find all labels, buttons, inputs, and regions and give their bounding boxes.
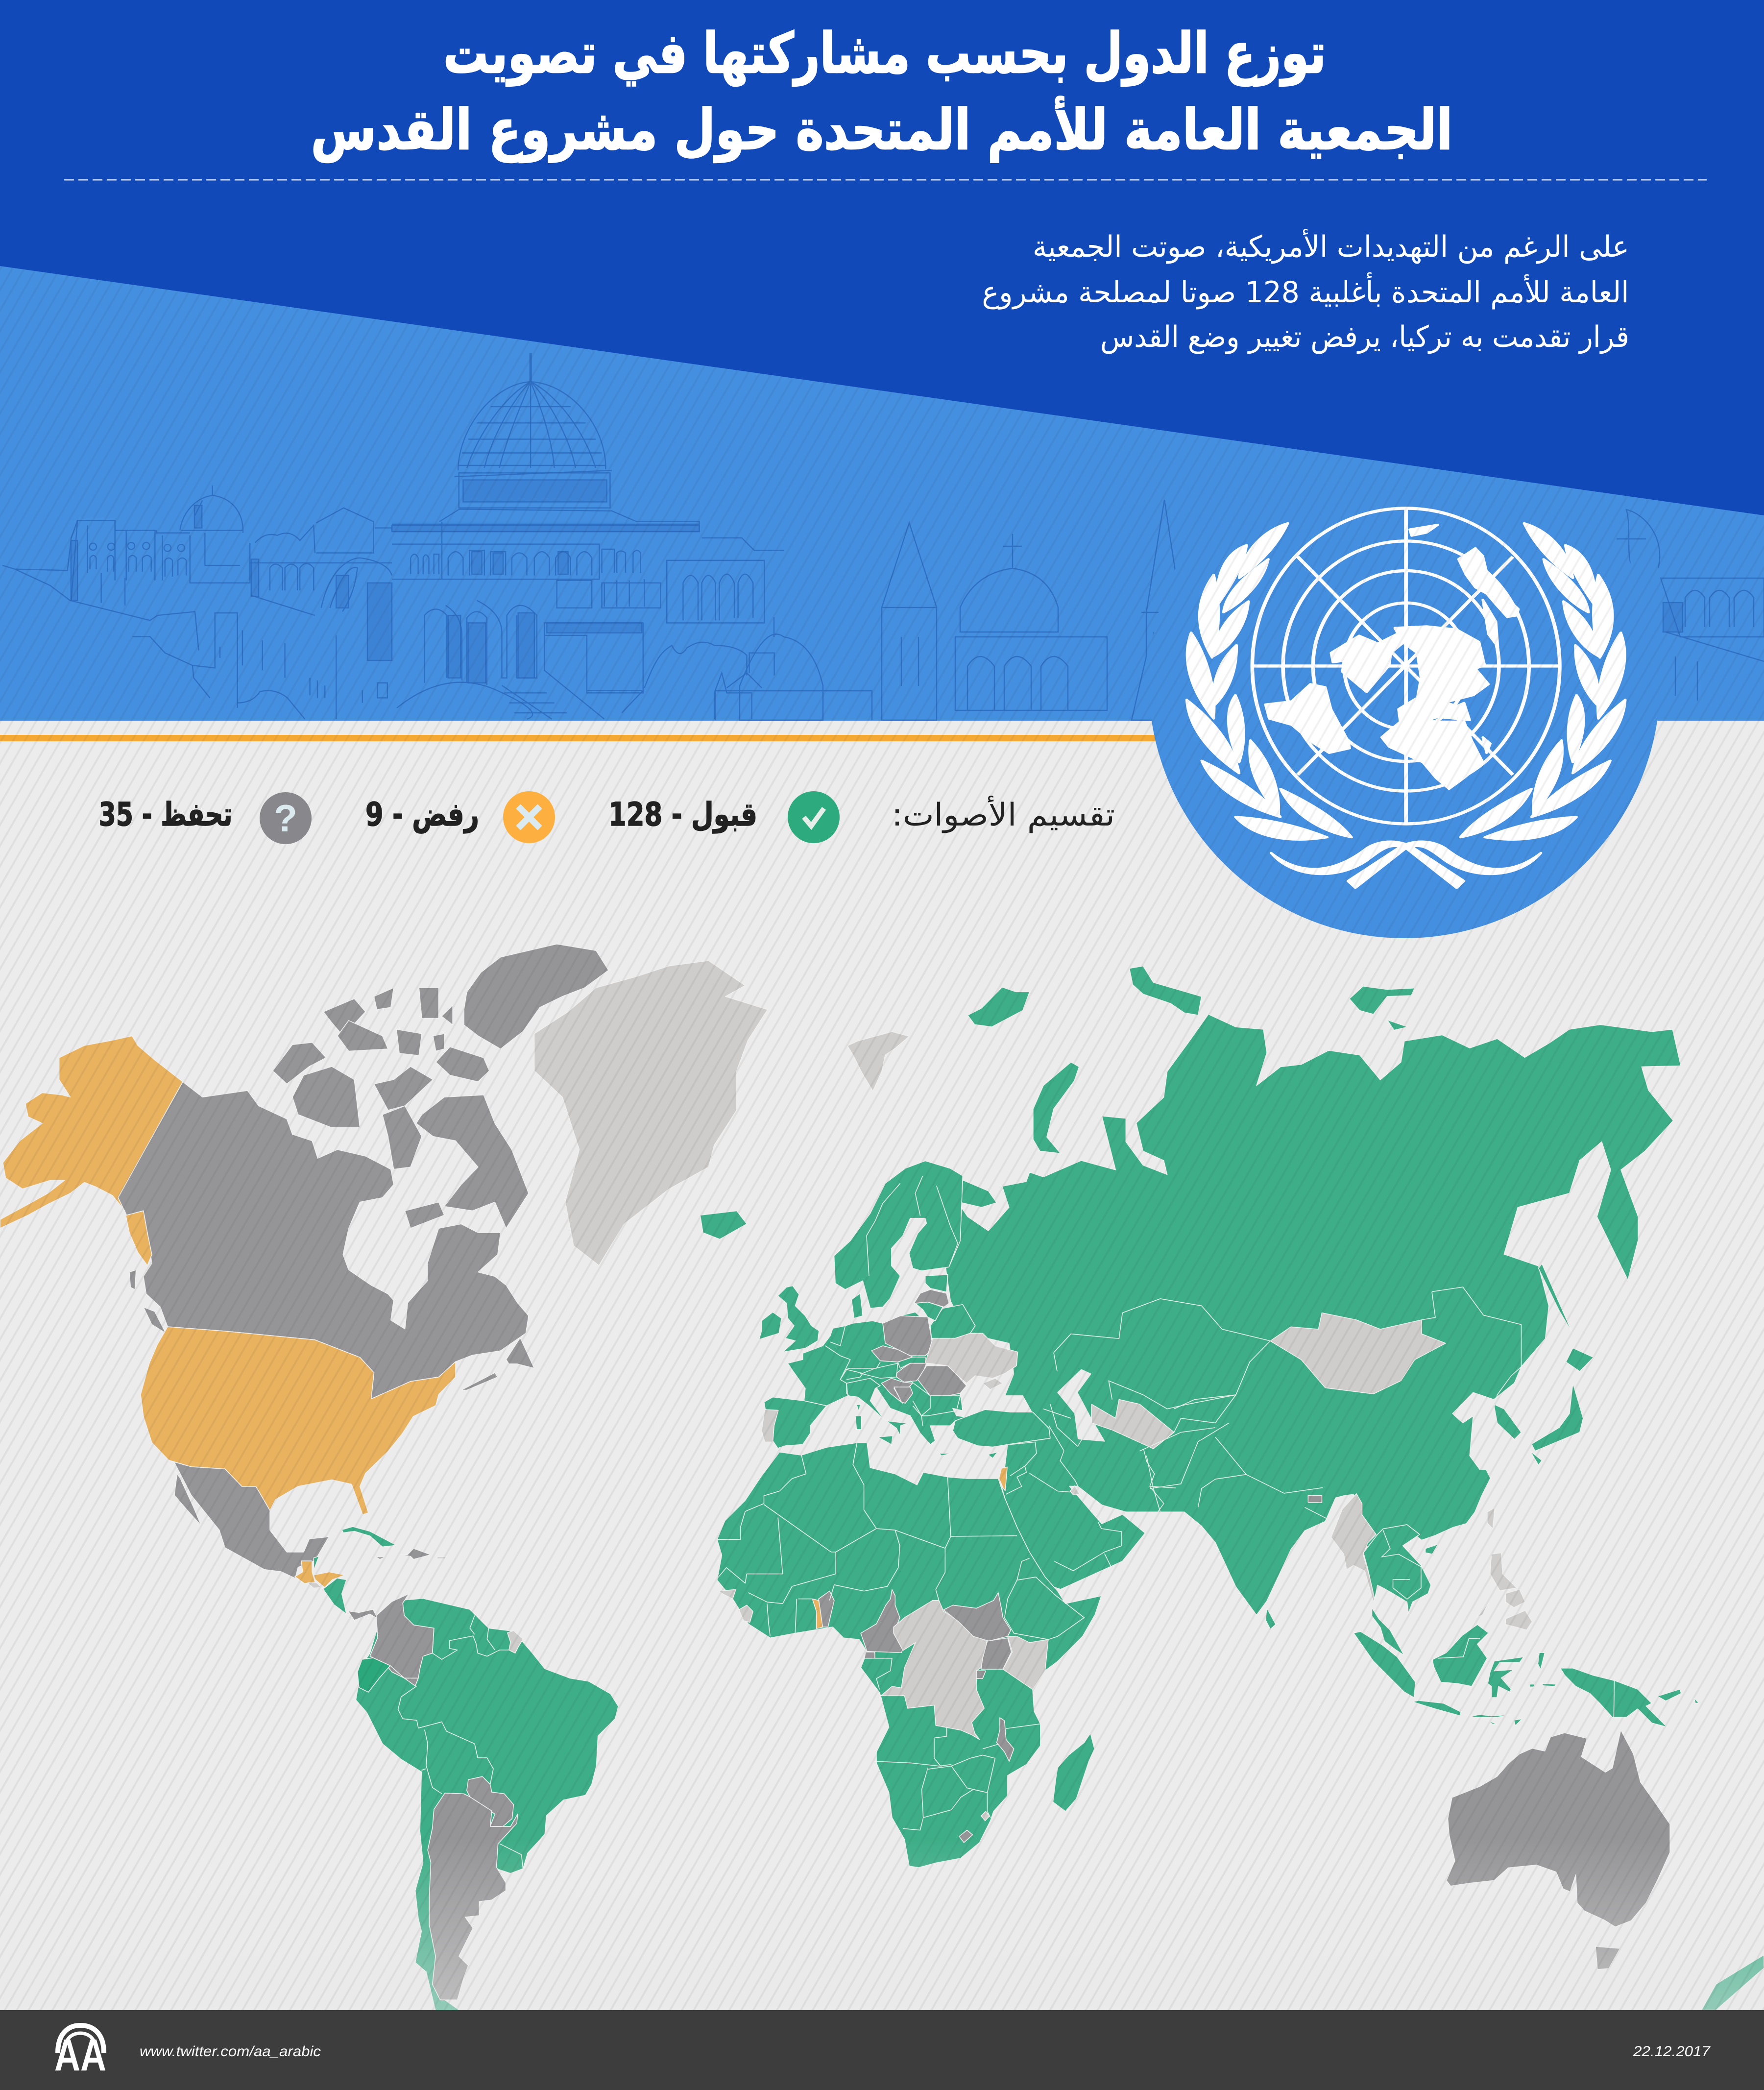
Indonesia, Malaysia and Papua — [1353, 1607, 1699, 1727]
USA — [141, 1327, 456, 1515]
Guatemala — [295, 1561, 315, 1583]
Israel — [999, 1467, 1007, 1491]
badge circle — [1149, 427, 1660, 938]
legend label: تقسيم الأصوات: — [892, 795, 1115, 833]
map: Asia mainland — [847, 966, 1681, 1629]
Latvia — [914, 1289, 949, 1307]
Cuba — [342, 1527, 396, 1547]
Romania — [918, 1366, 967, 1396]
illustration: Jerusalem skyline sketch — [2, 353, 1764, 720]
globe rings — [1252, 508, 1560, 824]
intro line 3: قرار تقدمت به تركيا، يرفض تغيير وضع القدس — [1100, 320, 1629, 354]
Western and central Europe — [788, 1312, 968, 1444]
Hainan — [1426, 1544, 1438, 1554]
Mongolia — [1270, 1313, 1446, 1394]
Nicaragua and Costa Rica — [323, 1578, 346, 1614]
Greenland — [534, 961, 768, 1265]
footer url: www.twitter.com/aa_arabic — [140, 2043, 321, 2060]
Africa outline — [717, 1443, 1101, 1868]
Hungary — [896, 1363, 926, 1382]
intro line 2: العامة للأمم المتحدة بأغلبية 128 صوتا لمصلحة مشروع — [982, 272, 1629, 310]
Panama — [348, 1609, 378, 1620]
Malawi — [997, 1718, 1014, 1761]
Paraguay — [467, 1776, 514, 1826]
Estonia — [925, 1275, 948, 1292]
Japan and Sakhalin — [1265, 1264, 1594, 1629]
Madagascar — [1053, 1733, 1094, 1811]
Svalbard — [847, 1032, 909, 1091]
Colombia — [370, 1594, 434, 1686]
Rwanda — [976, 1671, 986, 1678]
title line 1: توزع الدول بحسب مشاركتها في تصويت — [443, 21, 1326, 86]
title divider — [64, 179, 1707, 180]
Haiti and Dominican Republic — [398, 1549, 431, 1559]
South China — [1323, 1470, 1490, 1536]
Bosnia — [894, 1387, 913, 1403]
borders Europe — [825, 1176, 1078, 1486]
borders Africa — [717, 1443, 1176, 1830]
legend item: abstained 35: تحفظ - 35 — [98, 796, 232, 833]
Crimea — [983, 1378, 1003, 1389]
map: North America — [0, 944, 768, 1578]
Argentina — [428, 1793, 518, 2000]
Kuwait — [1070, 1486, 1080, 1495]
Cameroon — [861, 1589, 903, 1653]
icon: abstained question mark — [260, 792, 312, 844]
Belize — [314, 1556, 319, 1570]
Australia — [1447, 1730, 1670, 1927]
United Kingdom — [778, 1286, 819, 1352]
Spain — [764, 1397, 826, 1448]
map: New Zealand — [1701, 1955, 1764, 2010]
header panel: dark blue — [0, 0, 1764, 539]
panel: UN emblem badge — [1149, 427, 1660, 938]
Caspian Sea — [1057, 1369, 1105, 1442]
borders South America — [390, 1616, 523, 1869]
Philippines — [1477, 1553, 1532, 1630]
logo: AA: AA — [54, 2030, 106, 2080]
Kenya — [1003, 1636, 1048, 1690]
Italy — [846, 1378, 908, 1436]
Alaska — [0, 1036, 183, 1265]
map: Europe — [759, 1161, 1078, 1491]
Equatorial Guinea — [865, 1652, 875, 1658]
intro paragraph — [982, 229, 1629, 354]
Myanmar — [1331, 1494, 1376, 1602]
Togo — [812, 1599, 823, 1628]
French Guiana — [507, 1630, 523, 1653]
footer — [0, 2010, 1764, 2090]
South America outline — [356, 1599, 618, 2011]
wreath right — [1348, 523, 1625, 888]
Central African Republic and DR Congo — [881, 1601, 987, 1740]
Honduras — [314, 1572, 345, 1587]
Turkey — [953, 1410, 1050, 1447]
wreath left — [1186, 523, 1464, 888]
map: Tasmania — [1595, 1946, 1620, 1969]
legend — [98, 791, 1115, 844]
Novaya Zemlya — [1033, 1062, 1079, 1153]
icon: abstained question mark: ? — [274, 797, 297, 840]
Ukraine — [925, 1333, 1018, 1383]
Canada — [118, 944, 608, 1399]
icon: accepted check — [788, 791, 840, 843]
map: Africa and Middle East — [717, 1443, 1176, 1868]
Denmark — [851, 1293, 863, 1318]
panel: light blue diagonal band — [0, 266, 1764, 721]
Croatia — [881, 1378, 913, 1403]
Lesotho — [959, 1830, 973, 1843]
map fade toward footer — [0, 1837, 1764, 2010]
Benin — [819, 1591, 834, 1627]
title line 2: الجمعية العامة للأمم المتحدة حول مشروع القدس — [311, 96, 1453, 163]
map: South-East Asia and Australia — [1323, 1470, 1699, 1927]
Czech Republic — [871, 1346, 913, 1362]
Turkmenistan — [1091, 1400, 1174, 1449]
world map — [0, 944, 1764, 2011]
Iceland — [700, 1211, 747, 1239]
Ireland — [759, 1312, 781, 1339]
borders SE Asia — [1382, 1530, 1614, 1717]
icon: UN emblem — [1186, 508, 1625, 888]
globe continents — [1265, 525, 1519, 789]
Guinea-Bissau — [719, 1589, 736, 1599]
title — [311, 21, 1453, 163]
El Salvador — [308, 1583, 321, 1588]
Swaziland — [981, 1811, 990, 1821]
Bhutan — [1308, 1496, 1322, 1503]
Mexico — [168, 1460, 329, 1578]
Jamaica — [376, 1557, 386, 1559]
footer date: 22.12.2017 — [1633, 2043, 1711, 2060]
legend item: accepted 128: قبول - 128 — [608, 796, 757, 834]
Scandinavia and Finland — [834, 1161, 963, 1308]
Poland — [883, 1316, 933, 1356]
Uganda — [981, 1638, 1012, 1669]
Baja California — [168, 1462, 201, 1526]
Portugal — [762, 1410, 778, 1442]
Belarus — [930, 1305, 975, 1338]
Mediterranean islands — [855, 1405, 998, 1458]
map: Central and South America — [295, 1527, 618, 2011]
Puerto Rico — [437, 1557, 446, 1559]
Eurasia outline — [937, 1014, 1681, 1615]
Ecuador — [358, 1658, 390, 1692]
icon: rejected cross — [503, 791, 555, 843]
Taiwan — [1487, 1508, 1495, 1529]
legend item: rejected 9: رفض - 9 — [365, 796, 479, 833]
Franz Josef and Severnaya islands — [968, 966, 1415, 1030]
decorative orange rule — [0, 735, 1156, 741]
borders Asia — [1043, 1287, 1521, 1535]
Liberia — [739, 1605, 753, 1622]
Indochina — [1363, 1525, 1431, 1613]
Slovakia — [898, 1357, 925, 1368]
South Sudan — [943, 1593, 1011, 1641]
intro line 1: على الرغم من التهديدات الأمريكية، صوتت الجمعية — [1033, 229, 1629, 264]
Lithuania — [915, 1302, 942, 1321]
footer bar — [0, 2010, 1764, 2090]
